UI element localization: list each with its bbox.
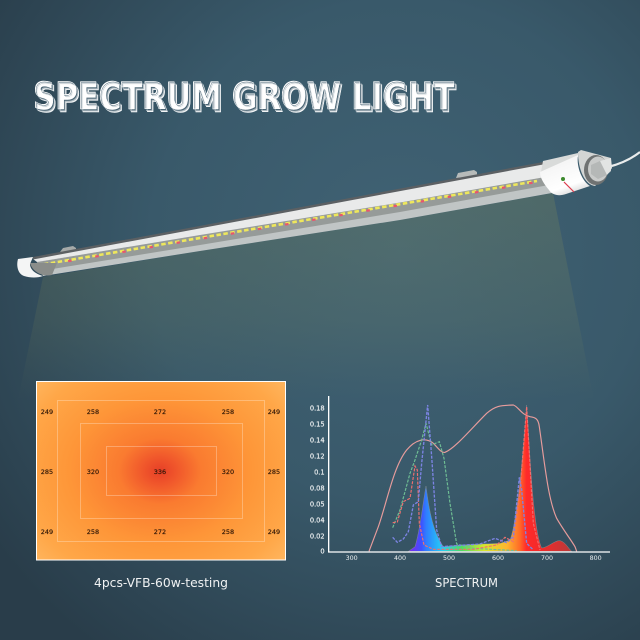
PPFD values: 285	[268, 468, 280, 476]
LED strip	[37, 181, 537, 266]
x axis labels: 700	[541, 555, 553, 562]
end cap right	[540, 150, 612, 195]
spectrum chart	[310, 396, 610, 562]
PPFD values: 258	[87, 528, 99, 536]
y axis labels: 0.18	[310, 404, 325, 412]
y axis labels: 0.08	[310, 484, 325, 492]
spectrum caption: SPECTRUM	[435, 576, 498, 590]
y axis labels: 0.04	[310, 516, 325, 524]
heat map caption: 4pcs-VFB-60w-testing	[94, 576, 228, 590]
PPFD values: 320	[87, 468, 99, 476]
y axis labels: 0.12	[310, 452, 325, 460]
heat map panel	[36, 382, 286, 560]
PPFD values: 258	[222, 408, 234, 416]
y axis labels: 0.1	[314, 468, 325, 476]
title: SPECTRUM GROW LIGHT	[33, 75, 455, 118]
PPFD values: 272	[154, 528, 166, 536]
cable	[608, 152, 640, 167]
cable gland	[584, 155, 612, 185]
x axis labels: 600	[492, 555, 504, 562]
PPFD values: 249	[41, 408, 53, 416]
PPFD values: 258	[87, 408, 99, 416]
end cap left	[17, 257, 57, 278]
top rail	[33, 162, 543, 260]
x axis labels: 300	[346, 555, 358, 562]
x axis labels	[346, 555, 602, 562]
PPFD values: 249	[268, 528, 280, 536]
y axis labels	[310, 404, 325, 556]
PPFD values: 285	[41, 468, 53, 476]
measurement zones	[58, 400, 264, 542]
tube inner channel	[37, 177, 549, 271]
y axis labels: 0.14	[310, 436, 325, 444]
PPFD values: 249	[41, 528, 53, 536]
x axis labels: 500	[443, 555, 455, 562]
tube lower cover	[37, 170, 552, 276]
x axis labels: 400	[394, 555, 406, 562]
PPFD values: 249	[268, 408, 280, 416]
green dashed curve	[393, 423, 517, 551]
logo	[561, 177, 574, 192]
collar	[578, 150, 611, 186]
overall envelope curve	[369, 405, 577, 551]
PPFD values	[41, 408, 280, 536]
mounting clips	[60, 170, 477, 252]
PPFD values: 258	[222, 528, 234, 536]
cap body	[540, 155, 590, 195]
blue dashed curve	[393, 405, 533, 550]
y axis labels: 0.02	[310, 532, 325, 540]
red dashed curve	[393, 407, 540, 550]
x axis labels: 800	[590, 555, 602, 562]
grow light fixture	[17, 150, 640, 278]
y axis labels: 0	[320, 548, 325, 556]
y axis labels: 0.15	[310, 420, 325, 428]
y axis labels: 0.05	[310, 500, 325, 508]
tube upper white band	[33, 164, 545, 262]
PPFD values: 272	[154, 408, 166, 416]
axes	[329, 396, 610, 552]
light beam	[18, 193, 594, 400]
PPFD values: 336	[154, 468, 166, 476]
filled spectrum	[408, 405, 572, 551]
PPFD values: 320	[222, 468, 234, 476]
